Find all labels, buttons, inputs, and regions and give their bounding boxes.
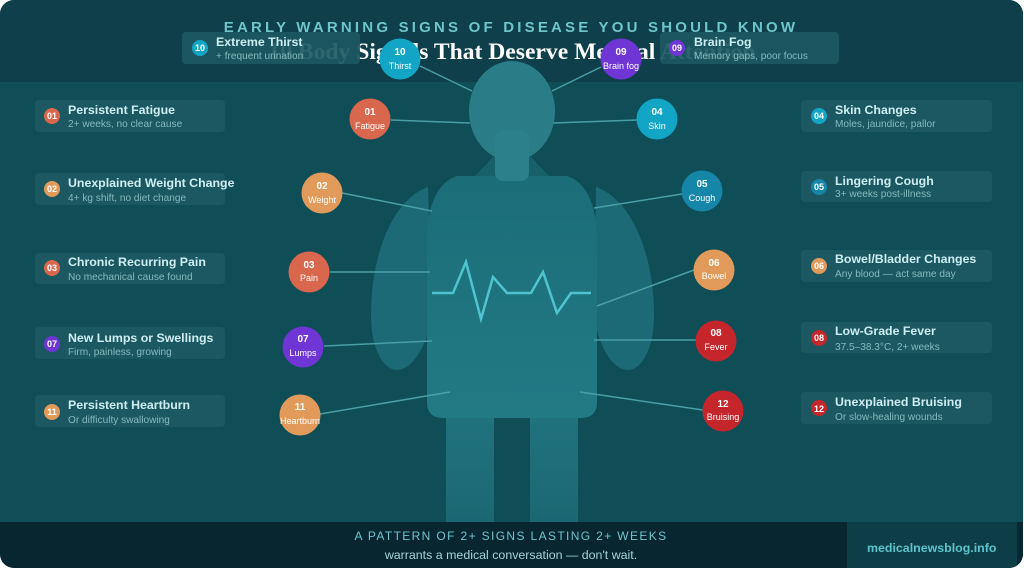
card: lingering cough: [801, 171, 992, 202]
card: bowel bladder changes: [801, 250, 992, 282]
marker: thirst: [380, 38, 420, 80]
marker: cough: [682, 170, 722, 212]
card: chronic recurring pain: 03: [47, 263, 57, 273]
card: persistent heartburn: [35, 395, 225, 427]
card: brain fog: 09: [672, 43, 682, 53]
card: lingering cough: 05: [814, 182, 824, 192]
left arm: [371, 187, 432, 370]
card: brain fog: Brain Fog: [694, 35, 752, 49]
marker: fatigue: 01: [364, 107, 376, 118]
card: bowel bladder changes: Any blood — act same day: [835, 269, 957, 280]
card: extreme thirst: 10: [195, 43, 205, 53]
marker: cough: 05: [696, 179, 708, 190]
card: persistent heartburn: Persistent Heartburn: [68, 398, 190, 412]
card: extreme thirst: + frequent urination: [216, 51, 303, 62]
card: persistent fatigue: 01: [47, 111, 57, 121]
marker: pain: [288, 252, 330, 292]
marker: brain fog: Brain fog: [603, 61, 639, 71]
marker: cough: Cough: [689, 193, 715, 203]
card: extreme thirst: Extreme Thirst: [216, 35, 302, 49]
card: persistent heartburn: 11: [47, 407, 57, 417]
marker: skin: Skin: [648, 121, 666, 131]
marker: lumps: Lumps: [289, 348, 317, 358]
marker: bowel: [694, 250, 734, 290]
marker: skin: 04: [651, 107, 663, 118]
marker: bowel: 06: [708, 258, 720, 269]
head: [469, 61, 555, 161]
footer band: [0, 522, 1023, 568]
marker: weight: [302, 172, 342, 214]
left leg: [446, 410, 494, 522]
card: new lumps or swellings: Firm, painless, growing: [68, 347, 172, 358]
card: unexplained bruising: [801, 392, 992, 424]
card: unexplained weight change: 4+ kg shift, no diet change: [68, 193, 187, 204]
card: chronic recurring pain: Chronic Recurring Pain: [68, 255, 206, 269]
card: low-grade fever: 08: [814, 333, 824, 343]
footer message: A PATTERN OF 2+ SIGNS LASTING 2+ WEEKS: [354, 529, 668, 543]
torso: [427, 176, 597, 418]
marker: thirst: Thirst: [389, 61, 412, 71]
card: new lumps or swellings: New Lumps or Swellings: [68, 331, 214, 345]
card: skin changes: Moles, jaundice, pallor: [835, 119, 936, 130]
card: skin changes: Skin Changes: [835, 103, 917, 117]
marker: fatigue: [350, 98, 390, 140]
card: unexplained weight change: [35, 173, 235, 205]
card: skin changes: 04: [814, 111, 824, 121]
card: lingering cough: 3+ weeks post-illness: [835, 189, 931, 200]
card: persistent fatigue: [35, 100, 225, 132]
right leg: [530, 410, 578, 522]
marker: heartburn: [280, 394, 320, 436]
footer message: [354, 529, 668, 562]
card: unexplained weight change: Unexplained Weight Change: [68, 176, 235, 190]
marker: fever: 08: [710, 328, 722, 339]
card: lingering cough: Lingering Cough: [835, 174, 934, 188]
card: new lumps or swellings: [35, 327, 225, 359]
marker: heartburn: 11: [295, 402, 306, 413]
marker: brain fog: 09: [615, 47, 627, 58]
card: unexplained bruising: 12: [814, 404, 824, 414]
marker: weight: 02: [316, 181, 328, 192]
connector lines: [320, 66, 703, 414]
card: low-grade fever: Low-Grade Fever: [835, 324, 936, 338]
card: low-grade fever: 37.5–38.3°C, 2+ weeks: [835, 342, 940, 353]
card: bowel bladder changes: 06: [814, 261, 824, 271]
card: extreme thirst: [182, 32, 360, 64]
marker: weight: Weight: [308, 195, 336, 205]
header band: [0, 0, 1023, 82]
marker: bowel: Bowel: [702, 271, 726, 281]
marker: fatigue: Fatigue: [355, 121, 385, 131]
marker: fever: Fever: [704, 342, 728, 352]
right arm: [594, 187, 654, 370]
card: brain fog: Memory gaps, poor focus: [694, 51, 808, 62]
card: brain fog: [660, 32, 839, 64]
card: low-grade fever: [801, 322, 992, 353]
card: chronic recurring pain: No mechanical cause found: [68, 272, 193, 283]
marker: bruising: Bruising: [707, 412, 739, 422]
card: chronic recurring pain: [35, 253, 225, 284]
main title: 10 Body Signals That Deserve Medical Attention: [268, 39, 756, 65]
marker: pain: Pain: [300, 273, 318, 283]
marker: bruising: [702, 390, 744, 432]
body silhouette: [371, 61, 654, 522]
marker: bruising: 12: [717, 399, 729, 410]
marker: pain: 03: [303, 260, 315, 271]
marker: heartburn: Heartburn: [280, 416, 320, 426]
heartbeat line: [432, 262, 591, 319]
card: persistent heartburn: Or difficulty swallowing: [68, 415, 170, 426]
marker: lumps: [282, 326, 324, 368]
marker: fever: [696, 320, 736, 362]
eyebrow heading: EARLY WARNING SIGNS OF DISEASE YOU SHOULD KNOW: [224, 19, 798, 36]
footer website panel: [847, 522, 1017, 568]
marker: thirst: 10: [394, 47, 406, 58]
card: skin changes: [801, 100, 992, 132]
card: unexplained bruising: Or slow-healing wounds: [835, 412, 943, 423]
card: new lumps or swellings: 07: [47, 339, 57, 349]
footer message: warrants a medical conversation — don't wait.: [384, 548, 637, 562]
marker: brain fog: [600, 38, 642, 80]
marker: skin: [636, 98, 678, 140]
website credit: medicalnewsblog.info: [867, 541, 997, 555]
card: persistent fatigue: 2+ weeks, no clear cause: [68, 119, 183, 130]
card: persistent fatigue: Persistent Fatigue: [68, 103, 175, 117]
card: unexplained bruising: Unexplained Bruising: [835, 395, 962, 409]
neck: [495, 131, 529, 181]
marker: lumps: 07: [297, 334, 309, 345]
card: unexplained weight change: 02: [47, 184, 57, 194]
card: bowel bladder changes: Bowel/Bladder Changes: [835, 252, 976, 266]
